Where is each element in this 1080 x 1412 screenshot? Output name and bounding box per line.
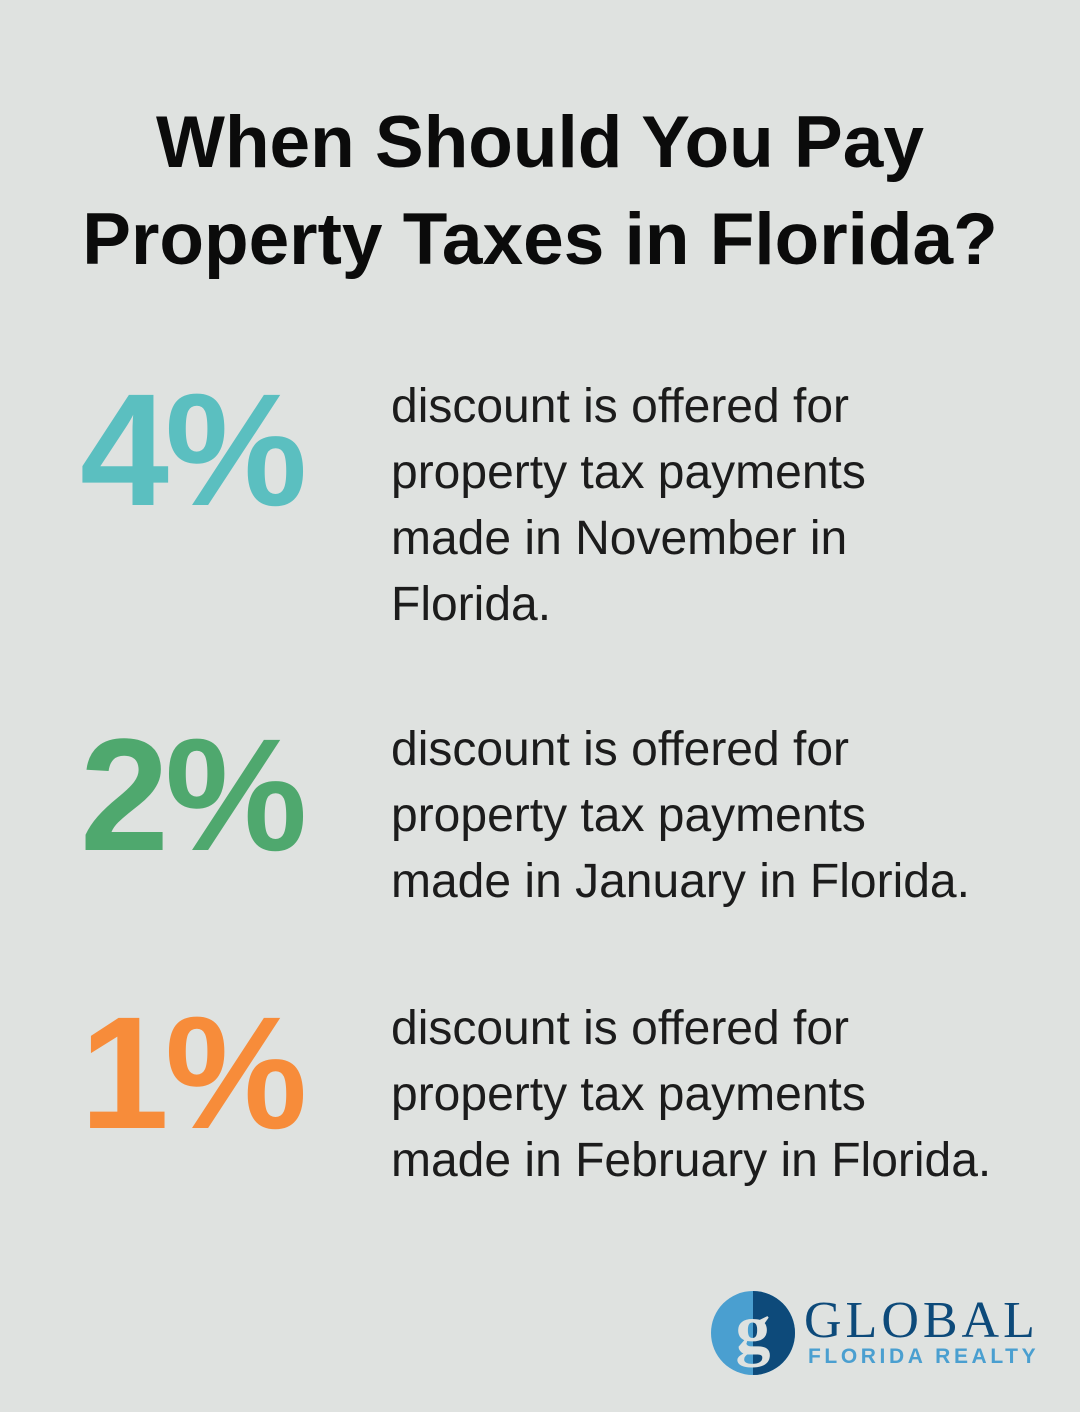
text: January discount: made in January in Florida. xyxy=(391,855,970,908)
stat: 4%: 4% xyxy=(80,360,303,539)
text: November discount: Florida. xyxy=(391,578,551,631)
stat: 1%: 1% xyxy=(80,983,303,1162)
icon: g circle xyxy=(711,1291,795,1375)
text: January discount: property tax payments xyxy=(391,789,866,842)
title xyxy=(82,102,998,280)
text: November discount: made in November in xyxy=(391,512,847,565)
text: January discount: discount is offered for xyxy=(391,723,849,776)
logo: Global Florida Realty xyxy=(711,1291,1039,1375)
title: Property Taxes in Florida? xyxy=(82,199,998,280)
text: February discount: property tax payments xyxy=(391,1068,866,1121)
text: January discount xyxy=(391,723,970,908)
logo text: FLORIDA REALTY: FLORIDA REALTY xyxy=(808,1345,1039,1368)
text: February discount: discount is offered for xyxy=(391,1002,849,1055)
logo text: GLOBAL: GLOBAL xyxy=(804,1292,1039,1349)
icon: g circle: g xyxy=(736,1291,770,1368)
text: February discount: made in February in Florida. xyxy=(391,1134,991,1187)
text: November discount xyxy=(391,380,866,631)
text: November discount: property tax payments xyxy=(391,446,866,499)
text: November discount: discount is offered for xyxy=(391,380,849,433)
text: February discount xyxy=(391,1002,991,1187)
title: When Should You Pay xyxy=(156,102,924,183)
stat: 2%: 2% xyxy=(80,705,303,884)
